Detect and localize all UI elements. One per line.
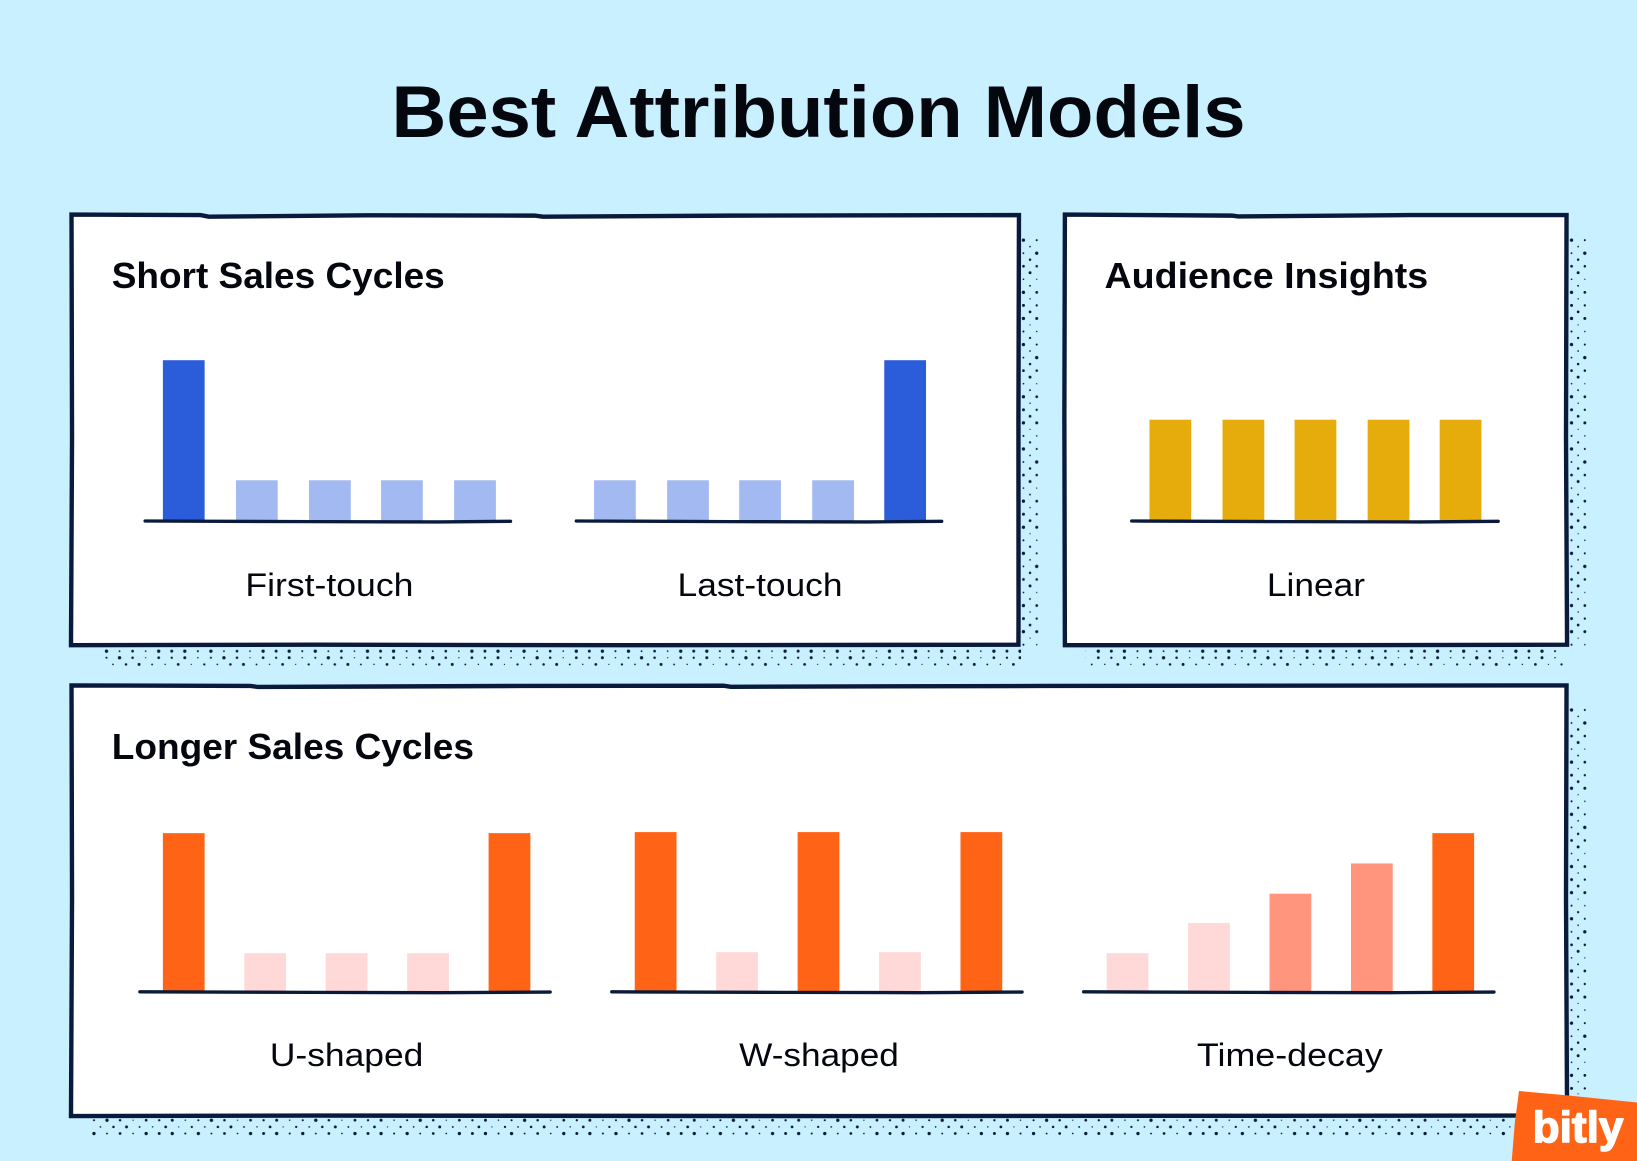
label: linear: Linear (1267, 567, 1365, 603)
panel: short sales cycles (71, 215, 1019, 645)
panel: audience insights (1064, 215, 1567, 645)
heading: longer sales cycles: Longer Sales Cycles (112, 726, 474, 767)
chart: last-touch (576, 360, 942, 522)
heading: short sales cycles: Short Sales Cycles (112, 255, 445, 296)
logo: bitly: bitly (1533, 1103, 1624, 1152)
dotted shadow: audience insights (1086, 238, 1588, 667)
heading: audience insights: Audience Insights (1105, 255, 1428, 296)
label: u-shaped: U-shaped (270, 1037, 423, 1073)
label: first-touch: First-touch (245, 567, 413, 603)
chart: first-touch (145, 360, 511, 522)
chart: linear (1132, 420, 1498, 522)
panel: longer sales cycles (71, 685, 1567, 1116)
chart: w-shaped (612, 832, 1022, 993)
title: Best Attribution Models (392, 72, 1245, 153)
chart: time-decay (1084, 833, 1494, 993)
logo: bitly (1512, 1091, 1637, 1161)
label: time-decay: Time-decay (1197, 1037, 1384, 1073)
label: w-shaped: W-shaped (739, 1037, 899, 1073)
chart: u-shaped (140, 833, 550, 993)
dotted shadow: short sales cycles (102, 238, 1040, 667)
label: last-touch: Last-touch (678, 567, 843, 603)
dotted shadow: longer sales cycles (92, 708, 1588, 1137)
